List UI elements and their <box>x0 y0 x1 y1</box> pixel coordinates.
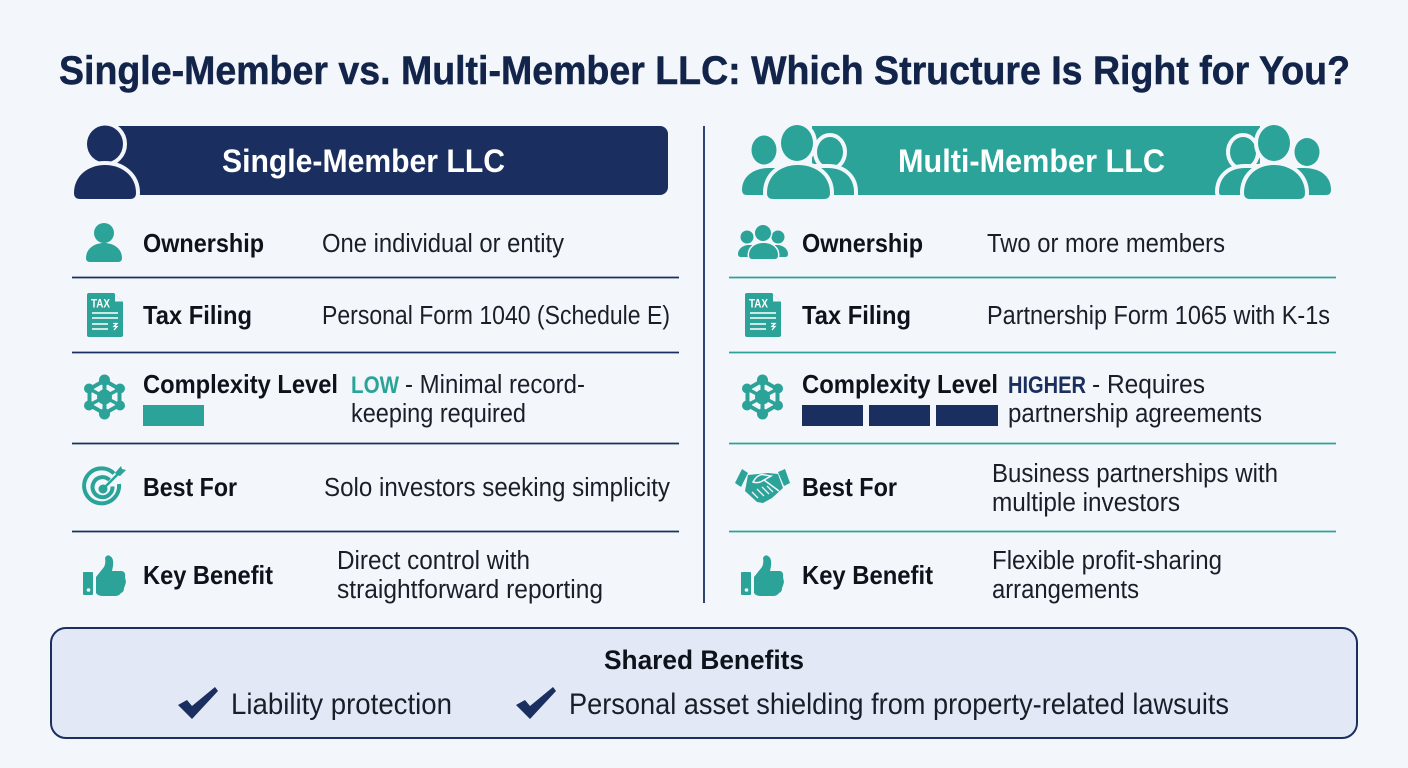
icon: network <box>84 374 125 420</box>
description: higher complexity <box>1008 371 1262 428</box>
row: ownership: Ownership <box>802 228 923 258</box>
icon: thumbs up <box>83 555 126 596</box>
row: best for: Business partnerships with <box>992 460 1278 488</box>
row: key benefit: Flexible profit-sharing <box>992 547 1222 575</box>
icon: tax document <box>87 293 123 337</box>
description: low complexity: keeping required <box>351 400 526 428</box>
row: key benefit: Key Benefit <box>143 560 273 590</box>
benefit: personal asset shielding: Personal asset shielding from property-related lawsuits <box>569 688 1229 721</box>
row: key benefit <box>83 547 603 604</box>
description: low complexity <box>351 371 585 428</box>
row: key benefit: straightforward reporting <box>337 576 603 604</box>
row: tax filing: Tax Filing <box>143 300 252 330</box>
panel: single-member LLC <box>72 126 679 604</box>
row: complexity level <box>84 369 585 428</box>
description: low complexity: - Minimal record- <box>405 371 585 399</box>
banner: single-member <box>110 126 668 195</box>
row: key benefit <box>741 547 1222 604</box>
row: tax filing <box>745 293 1330 337</box>
icon: group right <box>1219 125 1331 199</box>
panel: shared benefits <box>51 628 1357 738</box>
row: ownership: Ownership <box>143 228 264 258</box>
description: higher complexity: HIGHER <box>1008 372 1086 399</box>
row: key benefit: arrangements <box>992 576 1139 604</box>
row: complexity level: Complexity Level <box>143 369 338 399</box>
icon: target <box>84 466 126 503</box>
icon: person <box>86 223 122 262</box>
row: best for: Best For <box>143 472 237 502</box>
row: complexity level: Complexity Level <box>802 369 998 399</box>
row: best for: Best For <box>802 472 897 502</box>
row: tax filing: Partnership Form 1065 with K-1s <box>987 302 1330 330</box>
icon: thumbs up <box>741 555 784 596</box>
icon: single person <box>74 126 136 199</box>
panel: multi-member LLC <box>729 125 1336 604</box>
banner: multi-member <box>812 126 1260 195</box>
row: best for <box>84 466 670 503</box>
row: ownership <box>738 225 1225 259</box>
icon: group small <box>738 225 788 259</box>
complexity meter: low <box>143 405 204 426</box>
row: best for <box>735 460 1278 517</box>
icon: handshake <box>735 469 790 503</box>
description: higher complexity: - Requires <box>1092 371 1205 399</box>
icon: network <box>742 374 783 420</box>
row: key benefit: Direct control with <box>337 547 530 575</box>
banner: single-member: Single-Member LLC <box>222 143 505 179</box>
row: ownership: One individual or entity <box>322 230 564 258</box>
icon: tax document <box>745 293 781 337</box>
description: higher complexity: partnership agreements <box>1008 400 1262 428</box>
heading: shared benefits: Shared Benefits <box>604 645 804 675</box>
row: best for: Solo investors seeking simplicity <box>324 474 670 502</box>
icon: tax document: TAX <box>749 298 768 310</box>
icon: group left <box>742 125 854 199</box>
benefit: liability protection: Liability protection <box>231 688 452 721</box>
complexity meter: high <box>802 405 998 426</box>
row: key benefit: Key Benefit <box>802 560 933 590</box>
row: ownership <box>86 223 564 262</box>
row: tax filing: Tax Filing <box>802 300 911 330</box>
row: tax filing <box>87 293 670 337</box>
icon: tax document: TAX <box>91 298 110 310</box>
row: ownership: Two or more members <box>987 230 1225 258</box>
banner: multi-member: Multi-Member LLC <box>898 143 1165 179</box>
title: Single-Member vs. Multi-Member LLC: Which Structure Is Right for You? <box>59 49 1350 93</box>
row: complexity level <box>742 369 1262 428</box>
description: low complexity: LOW <box>351 372 400 399</box>
row: best for: multiple investors <box>992 489 1180 517</box>
row: tax filing: Personal Form 1040 (Schedule E) <box>322 302 670 330</box>
